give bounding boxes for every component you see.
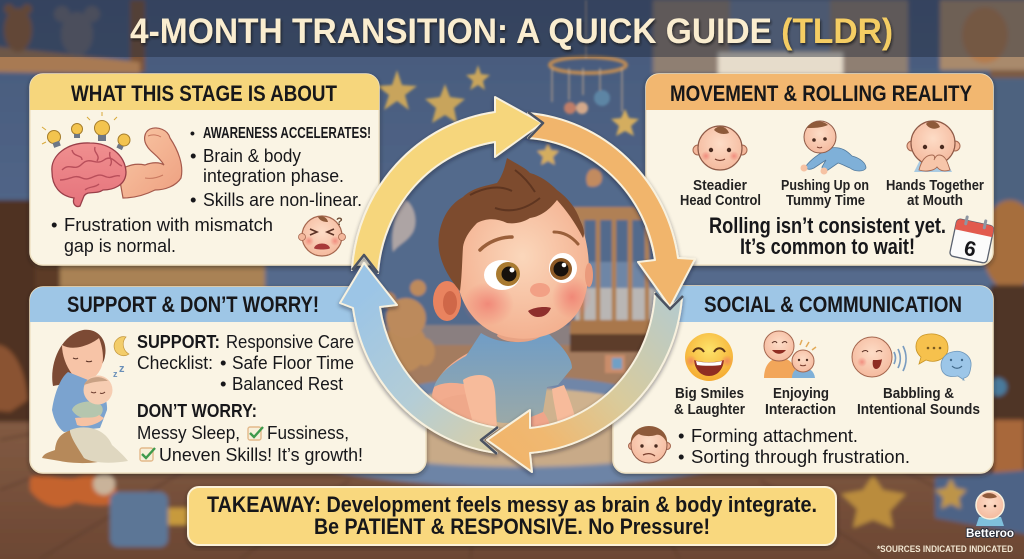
central scene: baby inside the ring bbox=[380, 140, 656, 427]
labels: Steadier bbox=[693, 177, 747, 194]
text block: don't worry: Messy Sleep, bbox=[137, 422, 240, 443]
arrow: orange bbox=[528, 113, 695, 307]
text block: support: SUPPORT: bbox=[137, 331, 220, 352]
text block: support: Checklist: bbox=[137, 352, 213, 373]
text block: bullets: Frustration with mismatch bbox=[64, 214, 273, 235]
logo: Betteroo bbox=[966, 491, 1014, 540]
icon: speech bubbles bbox=[916, 334, 971, 380]
heading: MOVEMENT & ROLLING REALITY bbox=[670, 81, 972, 106]
panel: movement and rolling reality bbox=[646, 74, 995, 265]
icon: mother holding sleeping baby bbox=[42, 330, 129, 463]
eyes bbox=[484, 260, 520, 290]
decorative stars and mobile bbox=[377, 0, 639, 136]
text block: bullets: • bbox=[190, 145, 196, 166]
text block: bullets: Sorting through frustration. bbox=[691, 446, 910, 467]
text block: bullets: AWARENESS ACCELERATES! bbox=[203, 125, 371, 142]
text block: bullets: • bbox=[190, 125, 195, 141]
text block: bullets bbox=[678, 425, 910, 467]
labels: Interaction bbox=[765, 401, 836, 418]
labels: at Mouth bbox=[907, 192, 963, 209]
panel: support and don't worry bbox=[30, 287, 426, 473]
icon: pushing up on tummy time bbox=[800, 121, 866, 174]
arrow: tan to blue bbox=[340, 263, 498, 453]
callout: takeaway: Be PATIENT & RESPONSIVE. No Pressure! bbox=[314, 514, 710, 539]
logo: Betteroo: Betteroo bbox=[966, 526, 1014, 540]
icon: parent and child interaction bbox=[764, 331, 816, 378]
text block: bullets: • bbox=[678, 425, 684, 446]
text block: support: Responsive Care bbox=[226, 331, 354, 352]
text block: don't worry: Fussiness, bbox=[267, 422, 349, 443]
arrow: yellow bbox=[352, 97, 542, 273]
icon: crying baby face bbox=[298, 216, 346, 256]
panel: what this stage is about bbox=[30, 74, 379, 265]
baby: head and face bbox=[433, 158, 593, 339]
text block: support: • bbox=[220, 373, 226, 394]
text block: bullets: Brain & body bbox=[203, 145, 302, 166]
icon: crying baby face: ? bbox=[336, 216, 343, 228]
text block: rolling note: It’s common to wait! bbox=[740, 234, 915, 259]
text block: rolling note bbox=[709, 213, 946, 259]
callout: takeaway: TAKEAWAY: Development feels messy as brain & body integrate. bbox=[207, 492, 817, 517]
labels: Big Smiles bbox=[675, 385, 744, 402]
labels bbox=[674, 385, 980, 418]
labels: & Laughter bbox=[674, 401, 745, 418]
labels: Head Control bbox=[680, 192, 761, 209]
text block: don't worry: DON’T WORRY: bbox=[137, 400, 257, 421]
text block: bullets: integration phase. bbox=[203, 165, 344, 186]
heading: SUPPORT & DON’T WORRY! bbox=[67, 292, 319, 317]
labels: Enjoying bbox=[773, 385, 829, 402]
icon: hands together at mouth bbox=[907, 121, 960, 172]
icon: laughing emoji bbox=[685, 333, 733, 381]
icon: steadier head control bbox=[693, 126, 747, 170]
heading: SOCIAL & COMMUNICATION bbox=[704, 292, 962, 317]
text block: bullets: • bbox=[190, 189, 196, 210]
arrow: blue-grey to orange bbox=[487, 293, 682, 472]
text block: bullets: Forming attachment. bbox=[691, 425, 858, 446]
text block: support: Balanced Rest bbox=[232, 373, 343, 394]
heading: WHAT THIS STAGE IS ABOUT bbox=[71, 81, 337, 106]
icon: brain and flexed arm with lightbulbs bbox=[42, 112, 182, 207]
callout: takeaway bbox=[188, 487, 836, 545]
text block: support: Safe Floor Time bbox=[232, 352, 354, 373]
icon: mother holding sleeping baby: z bbox=[113, 369, 118, 379]
icon: calendar: 6 bbox=[962, 237, 978, 262]
text block: bullets: • bbox=[678, 446, 684, 467]
text block: don't worry: Uneven Skills! It’s growth! bbox=[159, 444, 363, 465]
labels: Hands Together bbox=[886, 177, 984, 194]
text block: don't worry bbox=[137, 400, 363, 465]
hair bbox=[438, 158, 584, 291]
text block: support bbox=[137, 331, 354, 394]
labels: Babbling & bbox=[883, 385, 954, 402]
icon: mother holding sleeping baby: z bbox=[119, 363, 125, 375]
arrow ring: development cycle bbox=[340, 97, 695, 472]
icon: frustrated face bbox=[628, 426, 670, 463]
title banner bbox=[0, 0, 1024, 57]
baby: body bbox=[432, 333, 574, 427]
icon: calendar bbox=[949, 214, 995, 264]
text block: bullets bbox=[51, 125, 371, 256]
text block: bullets: Skills are non-linear. bbox=[203, 189, 362, 210]
text block: rolling note: Rolling isn’t consistent yet. bbox=[709, 213, 946, 238]
text block: support: • bbox=[220, 352, 226, 373]
icon: babbling baby with sound waves bbox=[852, 337, 906, 377]
labels: Intentional Sounds bbox=[857, 401, 980, 418]
panel: social and communication bbox=[613, 286, 993, 473]
labels bbox=[680, 177, 984, 209]
source note: *SOURCES INDICATED INDICATED bbox=[877, 544, 1013, 554]
heading: title text: 4-MONTH TRANSITION: A QUICK GUIDE (TLDR) bbox=[130, 12, 893, 51]
labels: Pushing Up on bbox=[781, 177, 869, 194]
text block: bullets: gap is normal. bbox=[64, 235, 176, 256]
labels: Tummy Time bbox=[786, 192, 865, 209]
text block: bullets: • bbox=[51, 214, 57, 235]
